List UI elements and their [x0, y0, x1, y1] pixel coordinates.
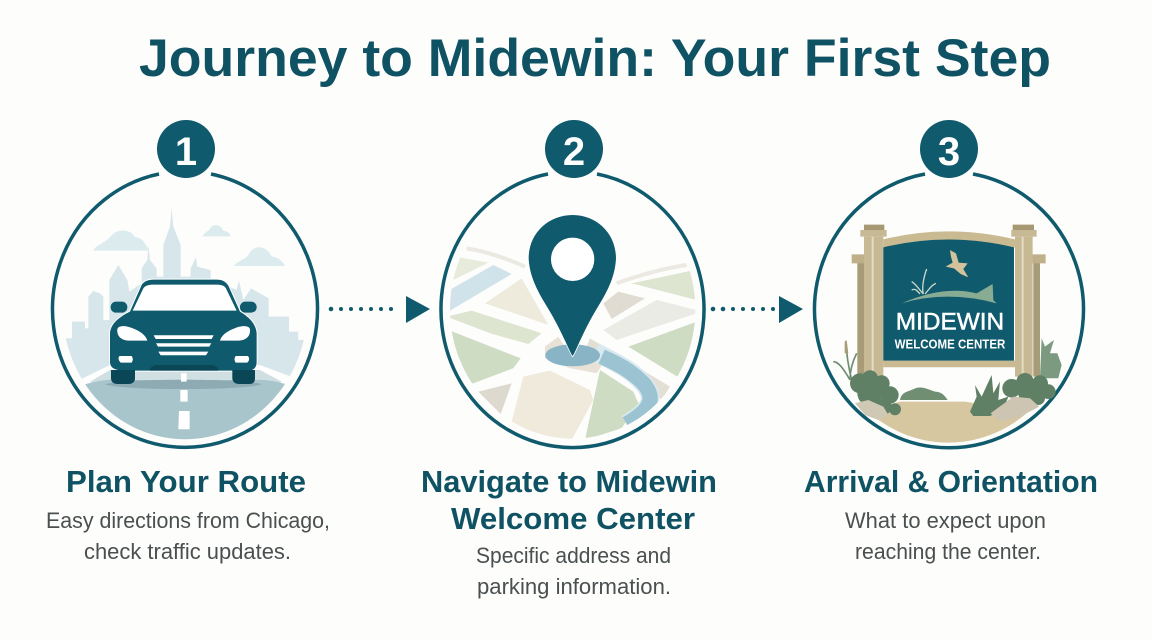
step 1 text: check traffic updates.: [84, 539, 291, 564]
step 2 text: Specific address and: [476, 543, 671, 568]
step 2 text: Welcome Center: [451, 501, 695, 536]
circle outline: step 3: [814, 174, 1084, 448]
title: Journey to Midewin: Your First Step: [139, 29, 1051, 88]
step 3 text: reaching the center.: [855, 539, 1041, 564]
step 1 text: [46, 464, 330, 564]
panel: step 3 arrival: [814, 120, 1084, 453]
circle outline: step 1: [52, 174, 317, 447]
circle outline: step 2: [441, 174, 704, 448]
step 2 text: [421, 464, 717, 599]
sign text: WELCOME CENTER: [895, 338, 1005, 352]
arrow: step 1 to step 2: [329, 296, 430, 323]
number badge 3: [920, 120, 978, 178]
illustration: map and location pin: [447, 215, 697, 440]
step 1 text: Plan Your Route: [66, 464, 306, 499]
step 2 text: Navigate to Midewin: [421, 464, 717, 499]
step 1 text: Easy directions from Chicago,: [46, 508, 330, 533]
number badge 2: 2: [563, 130, 585, 174]
arrow: step 2 to step 3: [711, 296, 803, 323]
panel: step 1 plan your route: [52, 120, 317, 453]
illustration: welcome sign: [833, 225, 1067, 453]
number badge 1: [157, 120, 215, 178]
number badge 1: 1: [175, 130, 197, 174]
sign text: [895, 308, 1005, 352]
sign text: MIDEWIN: [896, 308, 1004, 335]
panel: step 2 navigate: [441, 120, 704, 448]
number badge 2: [545, 120, 603, 178]
step 3 text: What to expect upon: [845, 508, 1046, 533]
step 3 text: [804, 464, 1098, 564]
step 2 text: parking information.: [477, 574, 671, 599]
step 3 text: Arrival & Orientation: [804, 464, 1098, 499]
illustration: car and city: [63, 208, 308, 453]
number badge 3: 3: [938, 130, 960, 174]
